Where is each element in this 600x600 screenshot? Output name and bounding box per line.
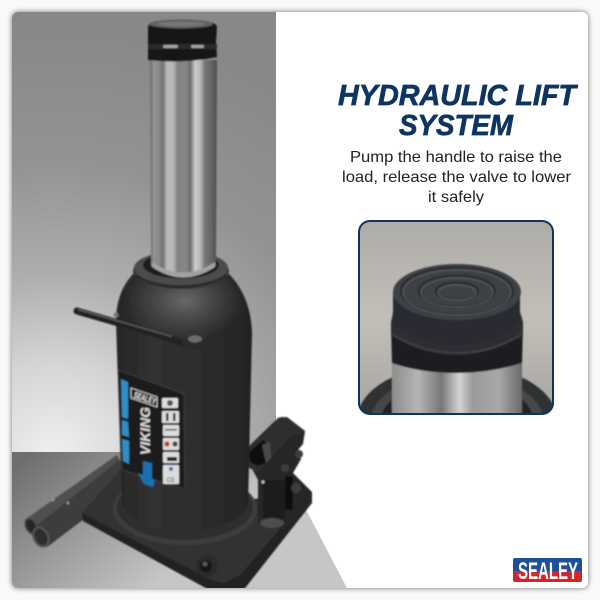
lower saddle band — [390, 334, 524, 374]
logo red half — [513, 571, 582, 582]
chrome ram — [150, 60, 217, 278]
blue strip — [121, 379, 129, 464]
jack body — [116, 274, 252, 531]
logo blue half — [513, 558, 582, 571]
handle tubes — [22, 455, 124, 550]
concentric rings — [401, 268, 513, 314]
jack base plate — [82, 468, 312, 592]
flare highlight — [393, 335, 521, 353]
heading line 1: HYDRAULIC LIFT — [338, 80, 578, 112]
studio floor — [12, 452, 347, 588]
panel: product photo backdrop — [12, 12, 347, 588]
brand box: SEALEY — [132, 390, 157, 406]
product label — [118, 370, 185, 489]
jack collar — [133, 251, 229, 289]
viking ship logo — [138, 461, 155, 487]
saddle top — [393, 264, 521, 320]
inset chrome ram — [390, 362, 523, 413]
description line 2: load, release the valve to lower — [342, 169, 572, 186]
studio wall — [12, 12, 276, 453]
illustration: bottle jack — [22, 20, 312, 592]
ram cap — [148, 20, 217, 61]
brand wordmark: VIKING — [137, 407, 153, 455]
saddle side — [392, 293, 521, 314]
inset border — [359, 221, 553, 414]
description line 3: it safely — [428, 189, 484, 206]
saddle flare — [391, 312, 523, 355]
logo: SEALEY — [513, 558, 582, 585]
release valve — [199, 559, 213, 573]
inset background — [359, 221, 553, 414]
heading line 2: SYSTEM — [399, 110, 514, 142]
heading — [338, 80, 578, 142]
safety icons: CE — [167, 478, 175, 484]
collar ring — [360, 377, 552, 413]
pump assembly — [243, 417, 312, 530]
description line 1: Pump the handle to raise the — [350, 149, 562, 166]
inset photo: rubber saddle close-up — [358, 220, 554, 415]
pump handle — [77, 310, 204, 350]
description text — [342, 149, 572, 206]
